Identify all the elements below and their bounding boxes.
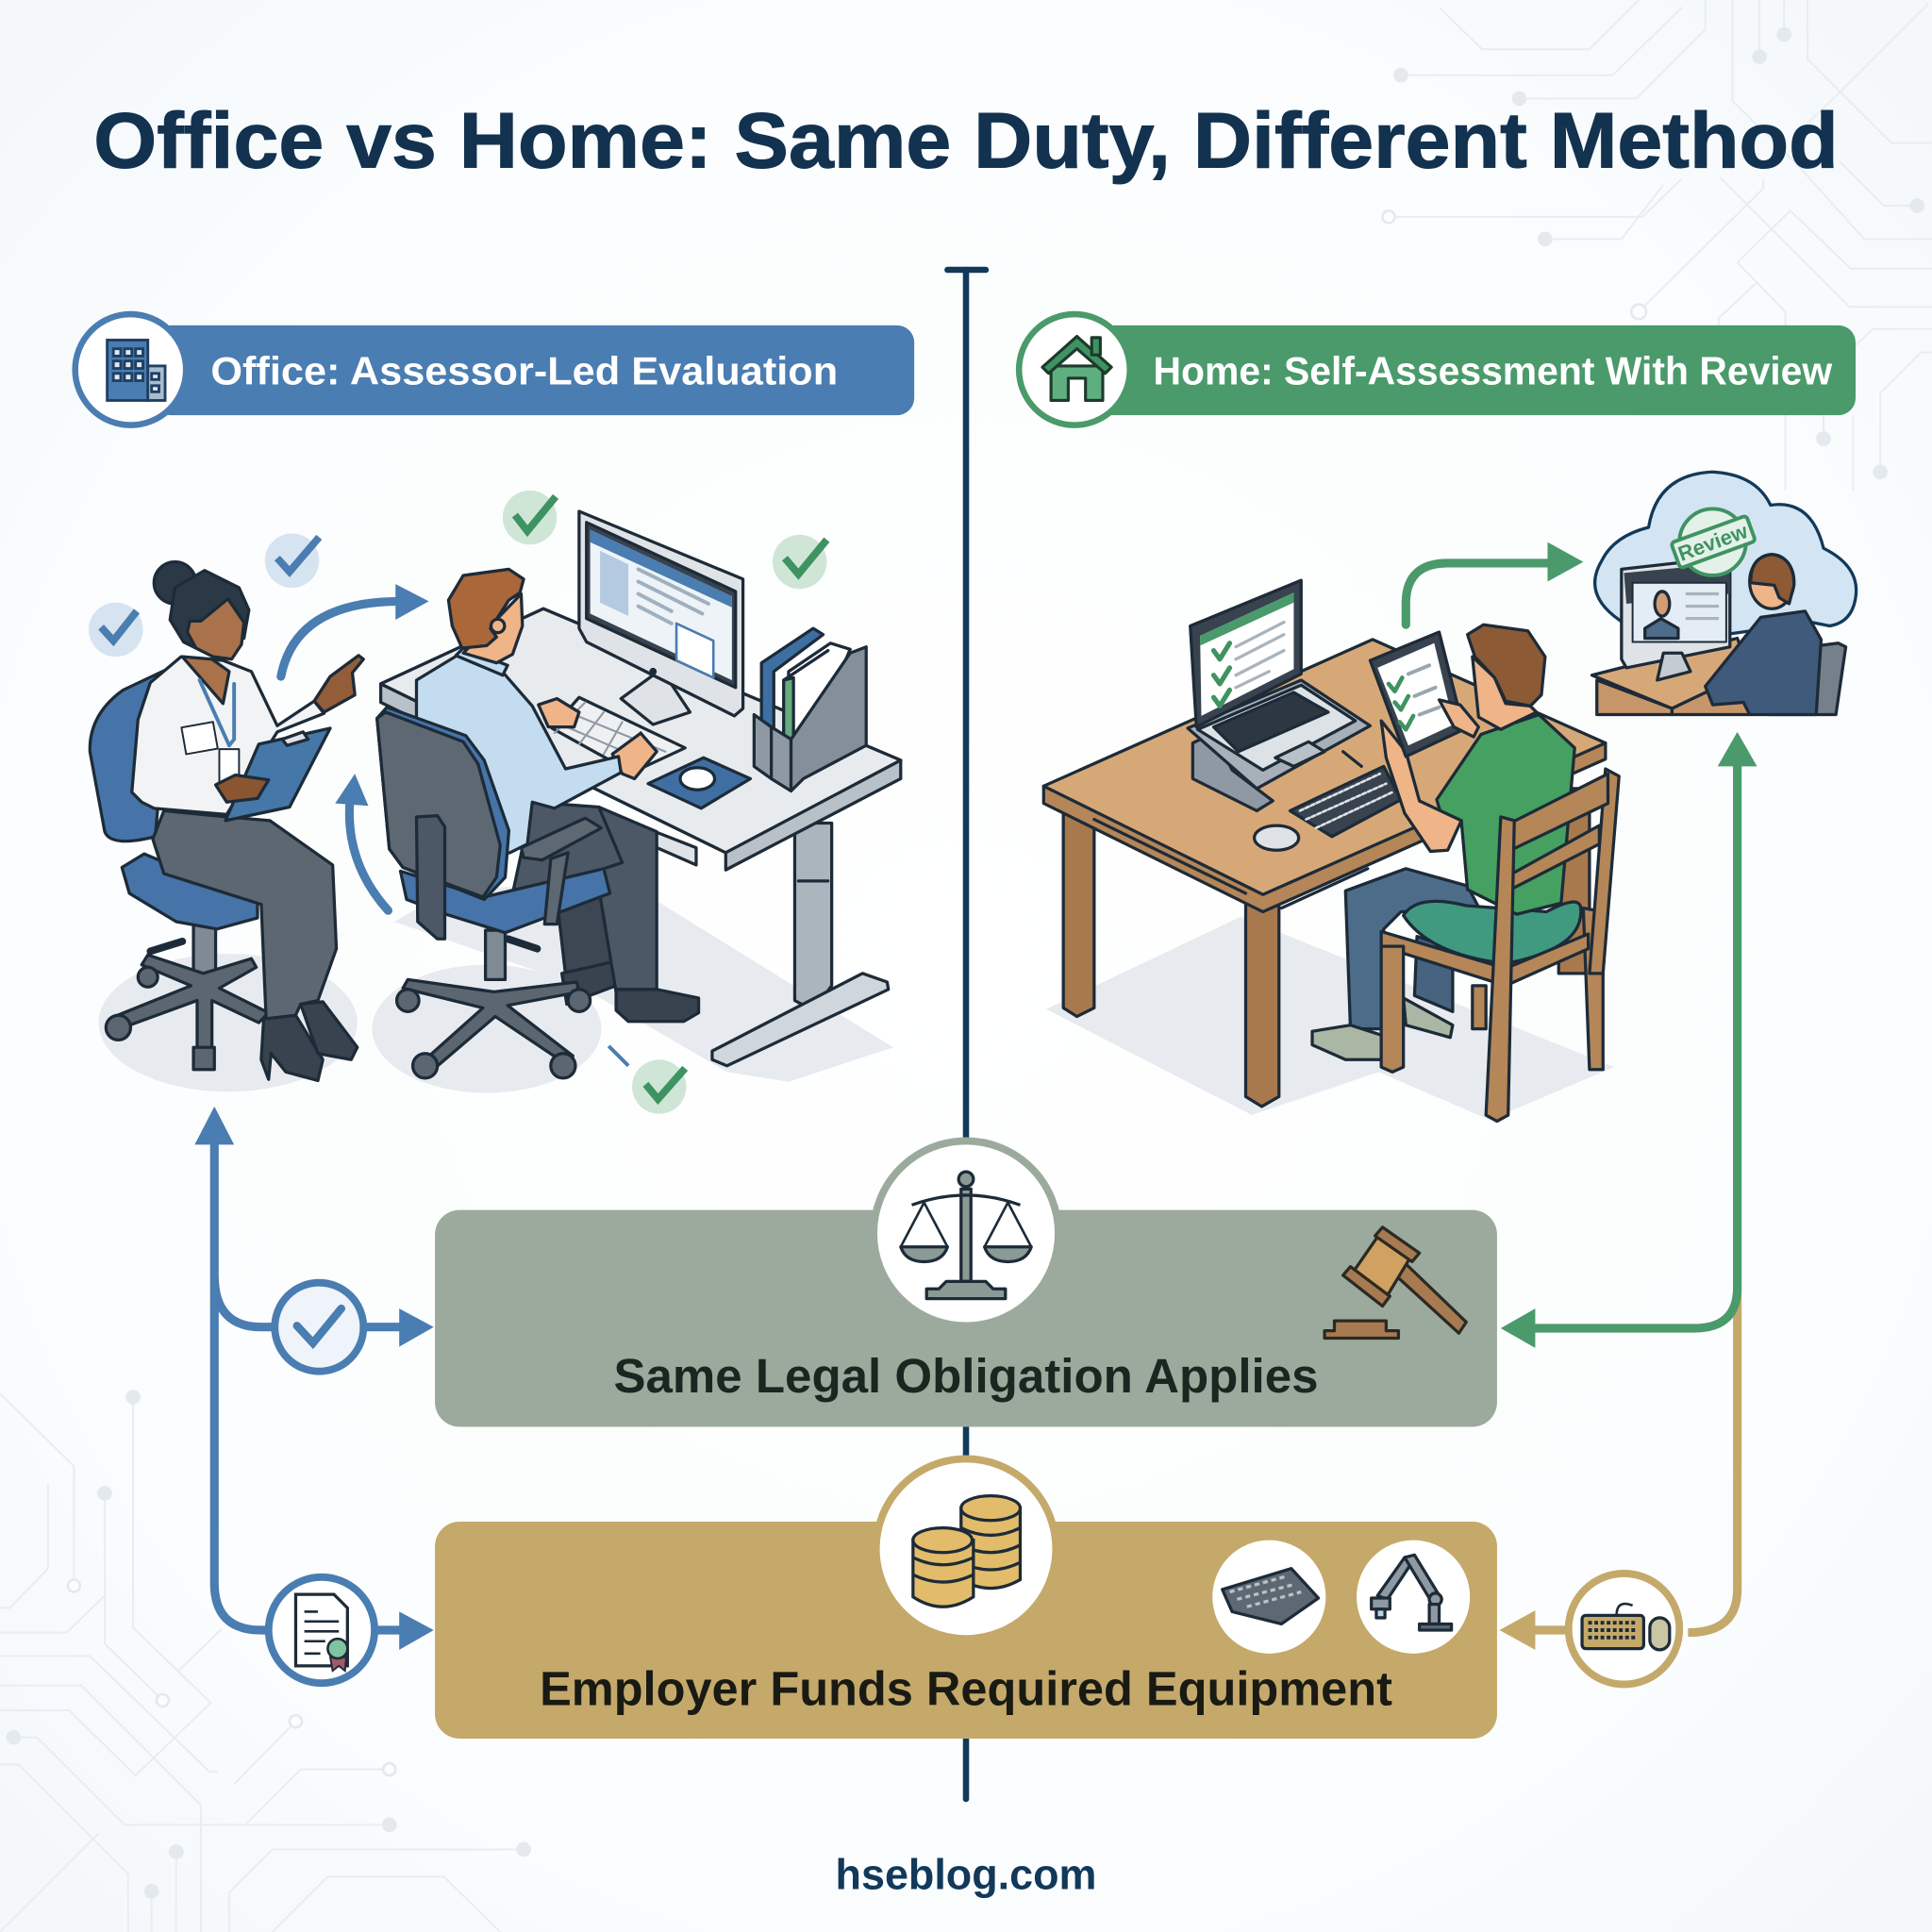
folder organiser <box>754 628 866 791</box>
keyboard and mouse <box>1255 766 1401 850</box>
man torso and arm <box>416 569 657 862</box>
check badges office <box>89 491 826 1114</box>
office feedback arrows <box>281 584 429 910</box>
right gold connector <box>1500 1288 1738 1650</box>
home header <box>1019 314 1856 425</box>
remote review scene <box>1592 472 1857 715</box>
reviewer desk <box>1592 639 1750 715</box>
centre divider line <box>947 270 986 1799</box>
icon: house <box>1042 337 1111 400</box>
laptop on stand <box>1188 580 1370 810</box>
man legs <box>511 802 699 1022</box>
office illustration <box>90 511 901 1093</box>
title: Office vs Home: Same Duty, Different Method <box>93 96 1839 185</box>
office header: Office: Assessor-Led Evaluation <box>210 349 838 393</box>
woman chair <box>90 668 269 1070</box>
reviewer person <box>1706 555 1846 715</box>
office header <box>75 314 914 425</box>
keyboard and mouse <box>552 697 750 808</box>
woman figure <box>132 562 363 1080</box>
desk top <box>381 608 901 870</box>
document certificate node <box>269 1577 375 1683</box>
icon: office building <box>108 340 165 400</box>
panel: employer funds equipment: Employer Funds Required Equipment <box>540 1662 1392 1716</box>
man chair base <box>397 930 591 1078</box>
man chair back and seat <box>377 708 610 939</box>
panel: same legal obligation: Same Legal Obligation Applies <box>613 1349 1319 1403</box>
left blue connector <box>194 1107 434 1650</box>
cloud <box>1595 472 1857 635</box>
icon: coins <box>913 1496 1020 1607</box>
home header: Home: Self-Assessment With Review <box>1154 349 1833 393</box>
keyboard and mouse node <box>1569 1574 1679 1684</box>
panel: employer funds equipment <box>435 1458 1497 1739</box>
floor shadow <box>1046 917 1614 1120</box>
floor shadows <box>98 887 893 1093</box>
check node <box>275 1283 363 1372</box>
icon: monitor arm <box>1372 1555 1452 1630</box>
home desk <box>1043 640 1606 1107</box>
wooden chair <box>1381 769 1619 1122</box>
reviewer monitor <box>1622 557 1730 680</box>
panel: same legal obligation <box>435 1141 1497 1426</box>
desk leg and foot <box>712 823 889 1066</box>
icon: scales <box>901 1172 1031 1299</box>
icon: gavel <box>1324 1227 1466 1338</box>
footer: hseblog.com <box>836 1850 1096 1898</box>
home worker <box>1312 625 1581 1059</box>
icon: footrest <box>1223 1569 1319 1624</box>
review stamp: Review <box>1674 519 1752 566</box>
review stamp <box>1671 508 1756 575</box>
monitor <box>579 511 743 724</box>
green curved arrow to review <box>1406 542 1583 625</box>
right green connector <box>1501 732 1757 1348</box>
home illustration <box>1043 580 1619 1122</box>
